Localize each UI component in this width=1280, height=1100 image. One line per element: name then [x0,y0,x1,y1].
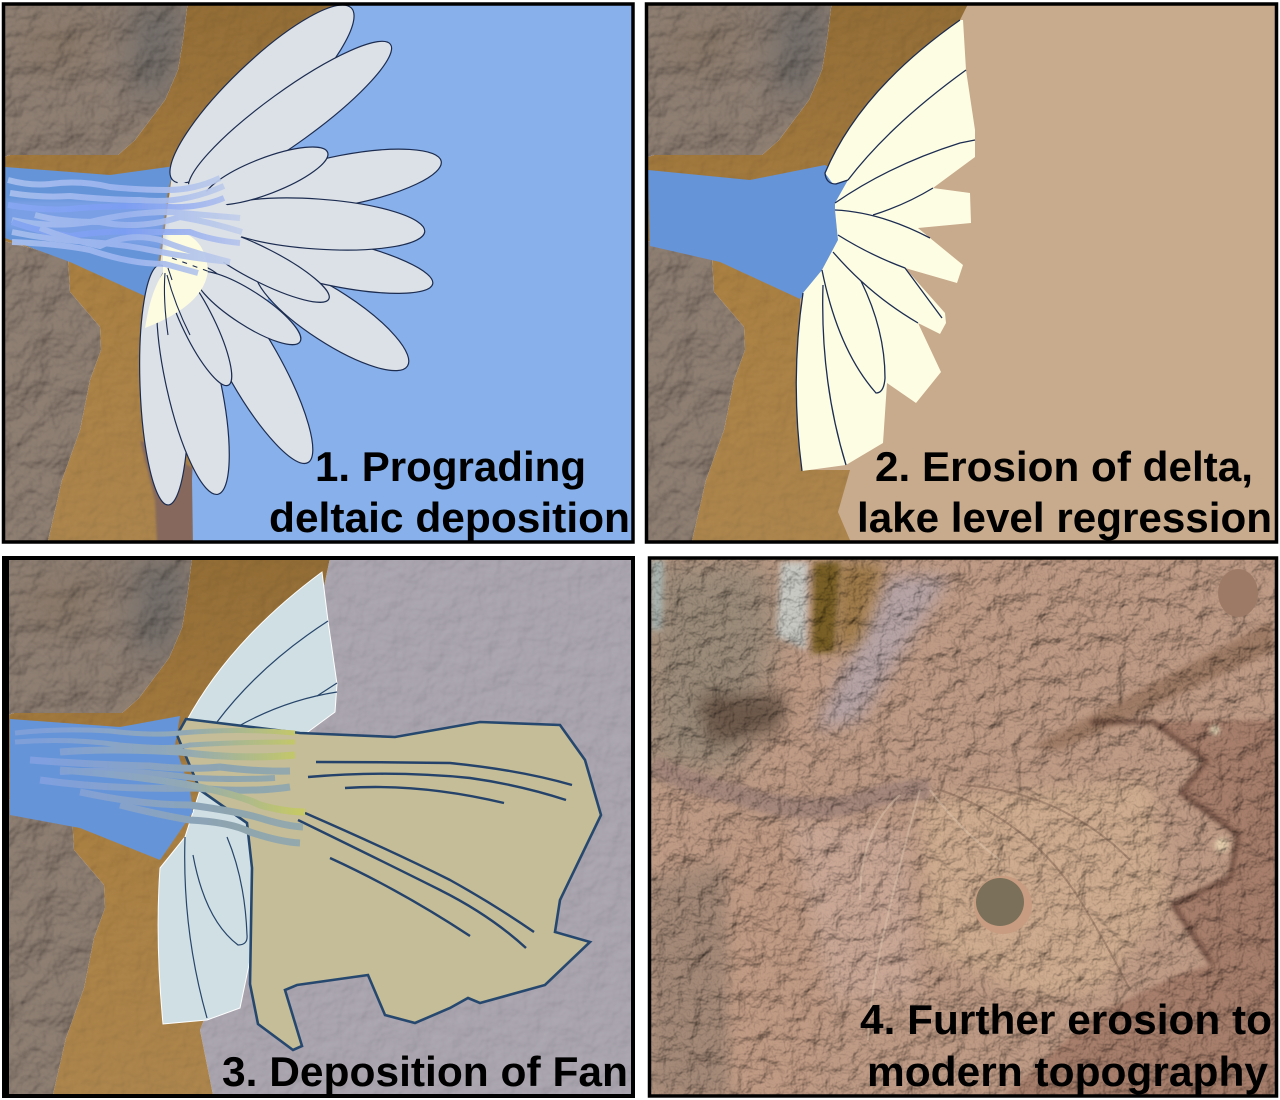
river channel [5,166,175,297]
river channel [10,716,193,860]
distributary strands [15,730,305,843]
sediment under delta [140,440,193,540]
lobe outlines [796,20,975,471]
label [860,996,1272,1095]
fan deposit [177,719,601,1050]
terrain background [5,6,334,540]
pale older delta patch [145,233,208,328]
distributary strands [6,178,242,273]
eroded delta lower [158,790,254,1024]
panel 3 frame [2,556,635,1098]
lobe lines over patch [164,258,210,335]
label: lake level regression [857,494,1272,541]
label: 1. Prograding [315,443,586,490]
eroded delta [796,20,975,471]
panel 4 frame [650,558,1276,1096]
label: 2. Erosion of delta, [875,443,1253,490]
terrain background [648,6,968,540]
label: 3. Deposition of Fan [222,1048,628,1095]
label [857,443,1272,541]
label: deltaic deposition [269,494,630,541]
satellite surface [648,558,1280,1100]
label: 4. Further erosion to [860,996,1272,1043]
eroded delta upper [186,572,337,734]
panel 2: erosion of delta, lake level regression [644,0,1280,545]
lake [192,0,640,545]
crater [974,876,1032,934]
river channel [648,165,848,299]
terrain background [9,560,330,1094]
panel 2 frame [646,4,1276,542]
lobe outlines [185,621,337,1018]
fan channels [298,762,572,948]
label: modern topography [867,1048,1269,1095]
lake floor [200,558,640,1100]
panel 1 frame [4,4,633,542]
label [269,443,630,541]
panel 3: deposition of fan [4,558,664,1100]
small crater [1218,569,1258,617]
delta lobes [136,0,446,506]
fan channels [860,785,1130,1040]
panel 1: prograding deltaic deposition [0,0,660,545]
exposed lake bed [800,4,1280,545]
panel 4: further erosion to modern topography [648,558,1280,1100]
